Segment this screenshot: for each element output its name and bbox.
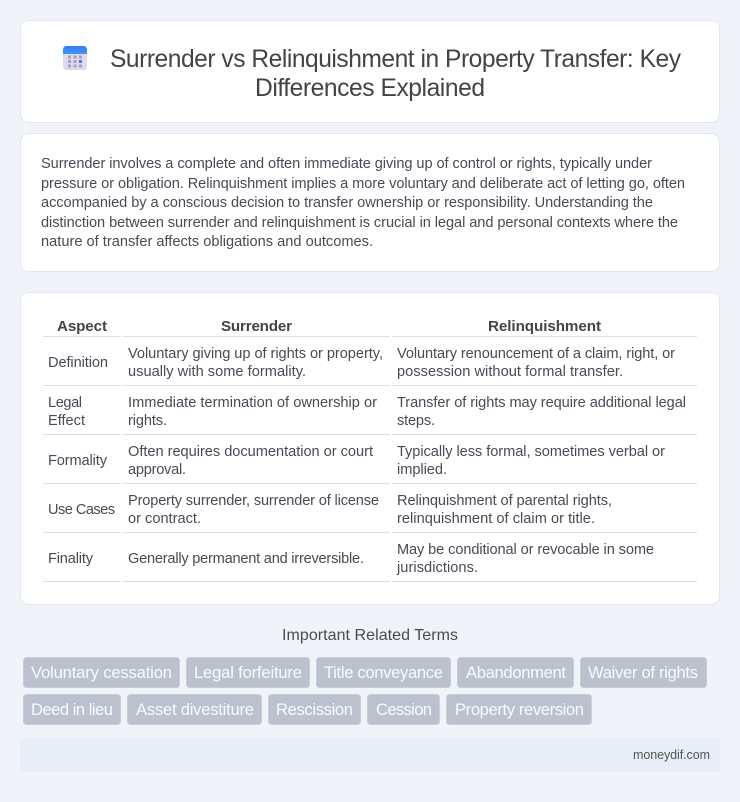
row: formality: Formality	[48, 453, 108, 469]
table header: Aspect	[57, 318, 107, 335]
row: legal effect: Immediate termination of ownership or	[128, 395, 377, 411]
row: definition: usually with some formality.	[128, 364, 306, 380]
tag: deed in lieu: Deed in lieu	[31, 700, 113, 719]
intro paragraph: pressure or obligation. Relinquishment implies a more voluntary and deliberate act of letting go, often	[41, 176, 685, 192]
row: formality: Typically less formal, sometimes verbal or	[397, 444, 665, 460]
row: legal effect: Effect	[48, 413, 85, 429]
row: legal effect	[48, 395, 686, 429]
row: use cases: Use Cases	[48, 502, 115, 518]
tag: voluntary cessation: Voluntary cessation	[31, 663, 172, 682]
icon: calendar	[63, 46, 87, 70]
tag: rescission	[268, 694, 360, 724]
tag: asset divestiture	[128, 694, 262, 724]
tag: cession	[368, 694, 440, 724]
row: legal effect: Legal	[48, 395, 82, 411]
row: definition: Definition	[48, 355, 108, 371]
row: use cases: or contract.	[128, 511, 201, 527]
row: legal effect: rights.	[128, 413, 167, 429]
row: definition: Voluntary renouncement of a claim, right, or	[397, 346, 675, 362]
row: use cases	[48, 493, 612, 527]
title: Surrender vs Relinquishment in Property Transfer: Key	[110, 46, 682, 73]
tag: legal forfeiture	[186, 658, 310, 688]
tag: title conveyance	[316, 658, 450, 688]
row: finality: jurisdictions.	[396, 560, 478, 576]
tag: cession: Cession	[376, 700, 432, 719]
row: use cases: relinquishment of claim or title.	[397, 511, 595, 527]
row: definition: Voluntary giving up of rights or property,	[128, 346, 383, 362]
intro paragraph	[41, 156, 685, 250]
tag: voluntary cessation	[24, 658, 180, 688]
tag: abandonment	[458, 658, 574, 688]
intro paragraph: accompanied by a conscious decision to transfer ownership or responsibility. Understanding the	[41, 195, 653, 211]
related term tags	[24, 658, 706, 724]
tag: waiver of rights	[580, 658, 706, 688]
table header: Relinquishment	[488, 318, 601, 335]
row: legal effect: Transfer of rights may require additional legal	[397, 395, 686, 411]
panel: introduction	[20, 134, 720, 272]
table header: Surrender	[221, 318, 292, 335]
row: finality: Finality	[48, 551, 94, 567]
tag: property reversion	[446, 694, 592, 724]
title: Differences Explained	[255, 75, 485, 102]
row: use cases: Relinquishment of parental rights,	[397, 493, 612, 509]
heading: related terms: Important Related Terms	[282, 627, 458, 644]
tag: waiver of rights: Waiver of rights	[588, 663, 698, 682]
row: finality: May be conditional or revocable in some	[397, 542, 654, 558]
panel: comparison table	[20, 292, 720, 604]
row: formality: Often requires documentation or court	[128, 444, 373, 460]
row: legal effect: steps.	[397, 413, 435, 429]
row: formality: implied.	[397, 462, 447, 478]
intro paragraph: distinction between surrender and relinquishment is crucial in legal and personal contexts where the	[41, 215, 678, 231]
tag: rescission: Rescission	[276, 700, 353, 719]
tag: title conveyance: Title conveyance	[324, 663, 443, 682]
footer bar: moneydif.com	[633, 748, 710, 762]
row: definition	[48, 346, 675, 380]
row: definition: possession without formal transfer.	[397, 364, 623, 380]
title	[110, 46, 682, 102]
tag: legal forfeiture: Legal forfeiture	[194, 663, 302, 682]
row: formality	[48, 444, 665, 478]
tag: asset divestiture: Asset divestiture	[136, 700, 254, 719]
tag: property reversion: Property reversion	[455, 700, 584, 719]
header card	[20, 20, 720, 122]
intro paragraph: Surrender involves a complete and often immediate giving up of control or rights, typically under	[41, 156, 652, 172]
row: finality: Generally permanent and irreversible.	[128, 551, 364, 567]
footer bar	[20, 738, 720, 772]
intro paragraph: nature of transfer affects obligations and outcomes.	[41, 234, 373, 250]
row: use cases: Property surrender, surrender of license	[128, 493, 379, 509]
row: formality: approval.	[128, 462, 186, 478]
tag: deed in lieu	[24, 694, 120, 724]
table header	[57, 318, 601, 335]
row: finality	[48, 542, 654, 576]
tag: abandonment: Abandonment	[466, 663, 566, 682]
